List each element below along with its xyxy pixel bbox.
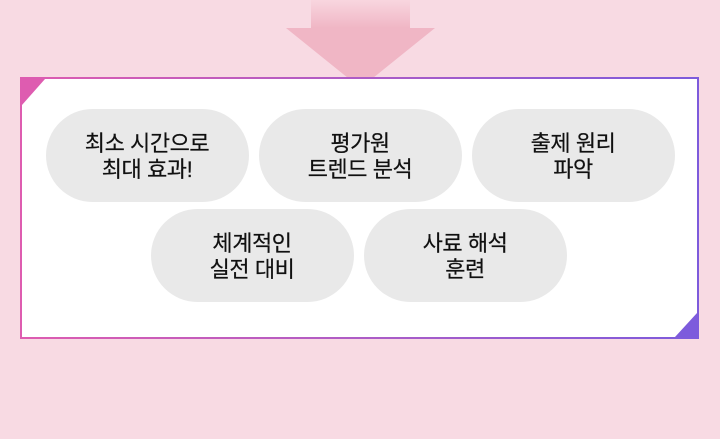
pill: evaluator trend: 평가원 [330,130,390,156]
pill: practice: 체계적인 [212,230,292,256]
pill: question principles: 출제 원리 [531,130,615,156]
pill: source analysis: 훈련 [445,256,485,282]
icon: down arrow [286,4,435,77]
pill: shortest time: 최소 시간으로 [85,130,209,156]
pill: question principles: 파악 [553,156,593,182]
pill: practice: 실전 대비 [210,256,294,282]
pill: evaluator trend [259,109,462,202]
pill: source analysis: 사료 해석 [423,230,507,256]
pill: practice [151,209,354,302]
pill: source analysis [364,209,567,302]
icon: top-left corner triangle [22,79,45,105]
panel: methods card [20,77,699,339]
pill: question principles [472,109,675,202]
pill: shortest time: 최대 효과! [102,156,192,182]
pill: evaluator trend: 트렌드 분석 [308,156,412,182]
icon: bottom-right corner triangle [675,313,697,337]
pill: shortest time [46,109,249,202]
